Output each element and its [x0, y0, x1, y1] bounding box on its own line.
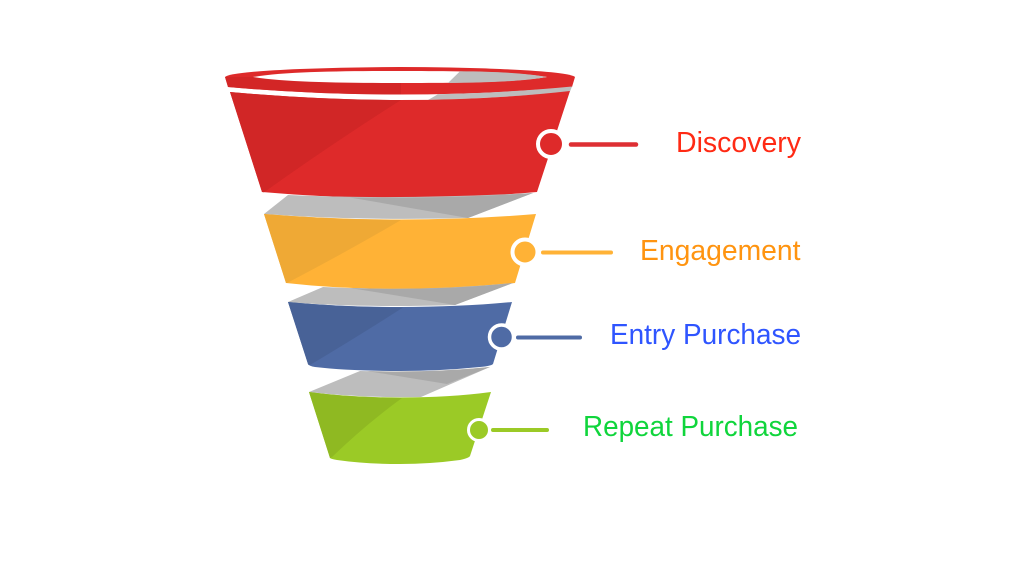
label: repeat purchase: Repeat Purchase — [583, 411, 798, 443]
callout: engagement — [512, 235, 801, 267]
ribbon connector 2 — [288, 283, 513, 306]
label: discovery: Discovery — [676, 127, 802, 159]
segment: entry purchase — [288, 302, 512, 371]
segment: repeat purchase — [309, 392, 491, 464]
funnel rim — [225, 67, 575, 94]
label: entry purchase: Entry Purchase — [610, 319, 801, 351]
label: engagement: Engagement — [640, 235, 801, 267]
ribbon connector 3 — [309, 367, 490, 397]
rim gap shadow — [428, 86, 572, 100]
callout: repeat purchase — [468, 411, 798, 443]
segment: engagement — [264, 214, 536, 289]
ribbon connector 1 — [264, 193, 533, 219]
callout: entry purchase — [490, 319, 801, 351]
segment: discovery — [230, 91, 570, 198]
callout: discovery — [538, 127, 802, 159]
